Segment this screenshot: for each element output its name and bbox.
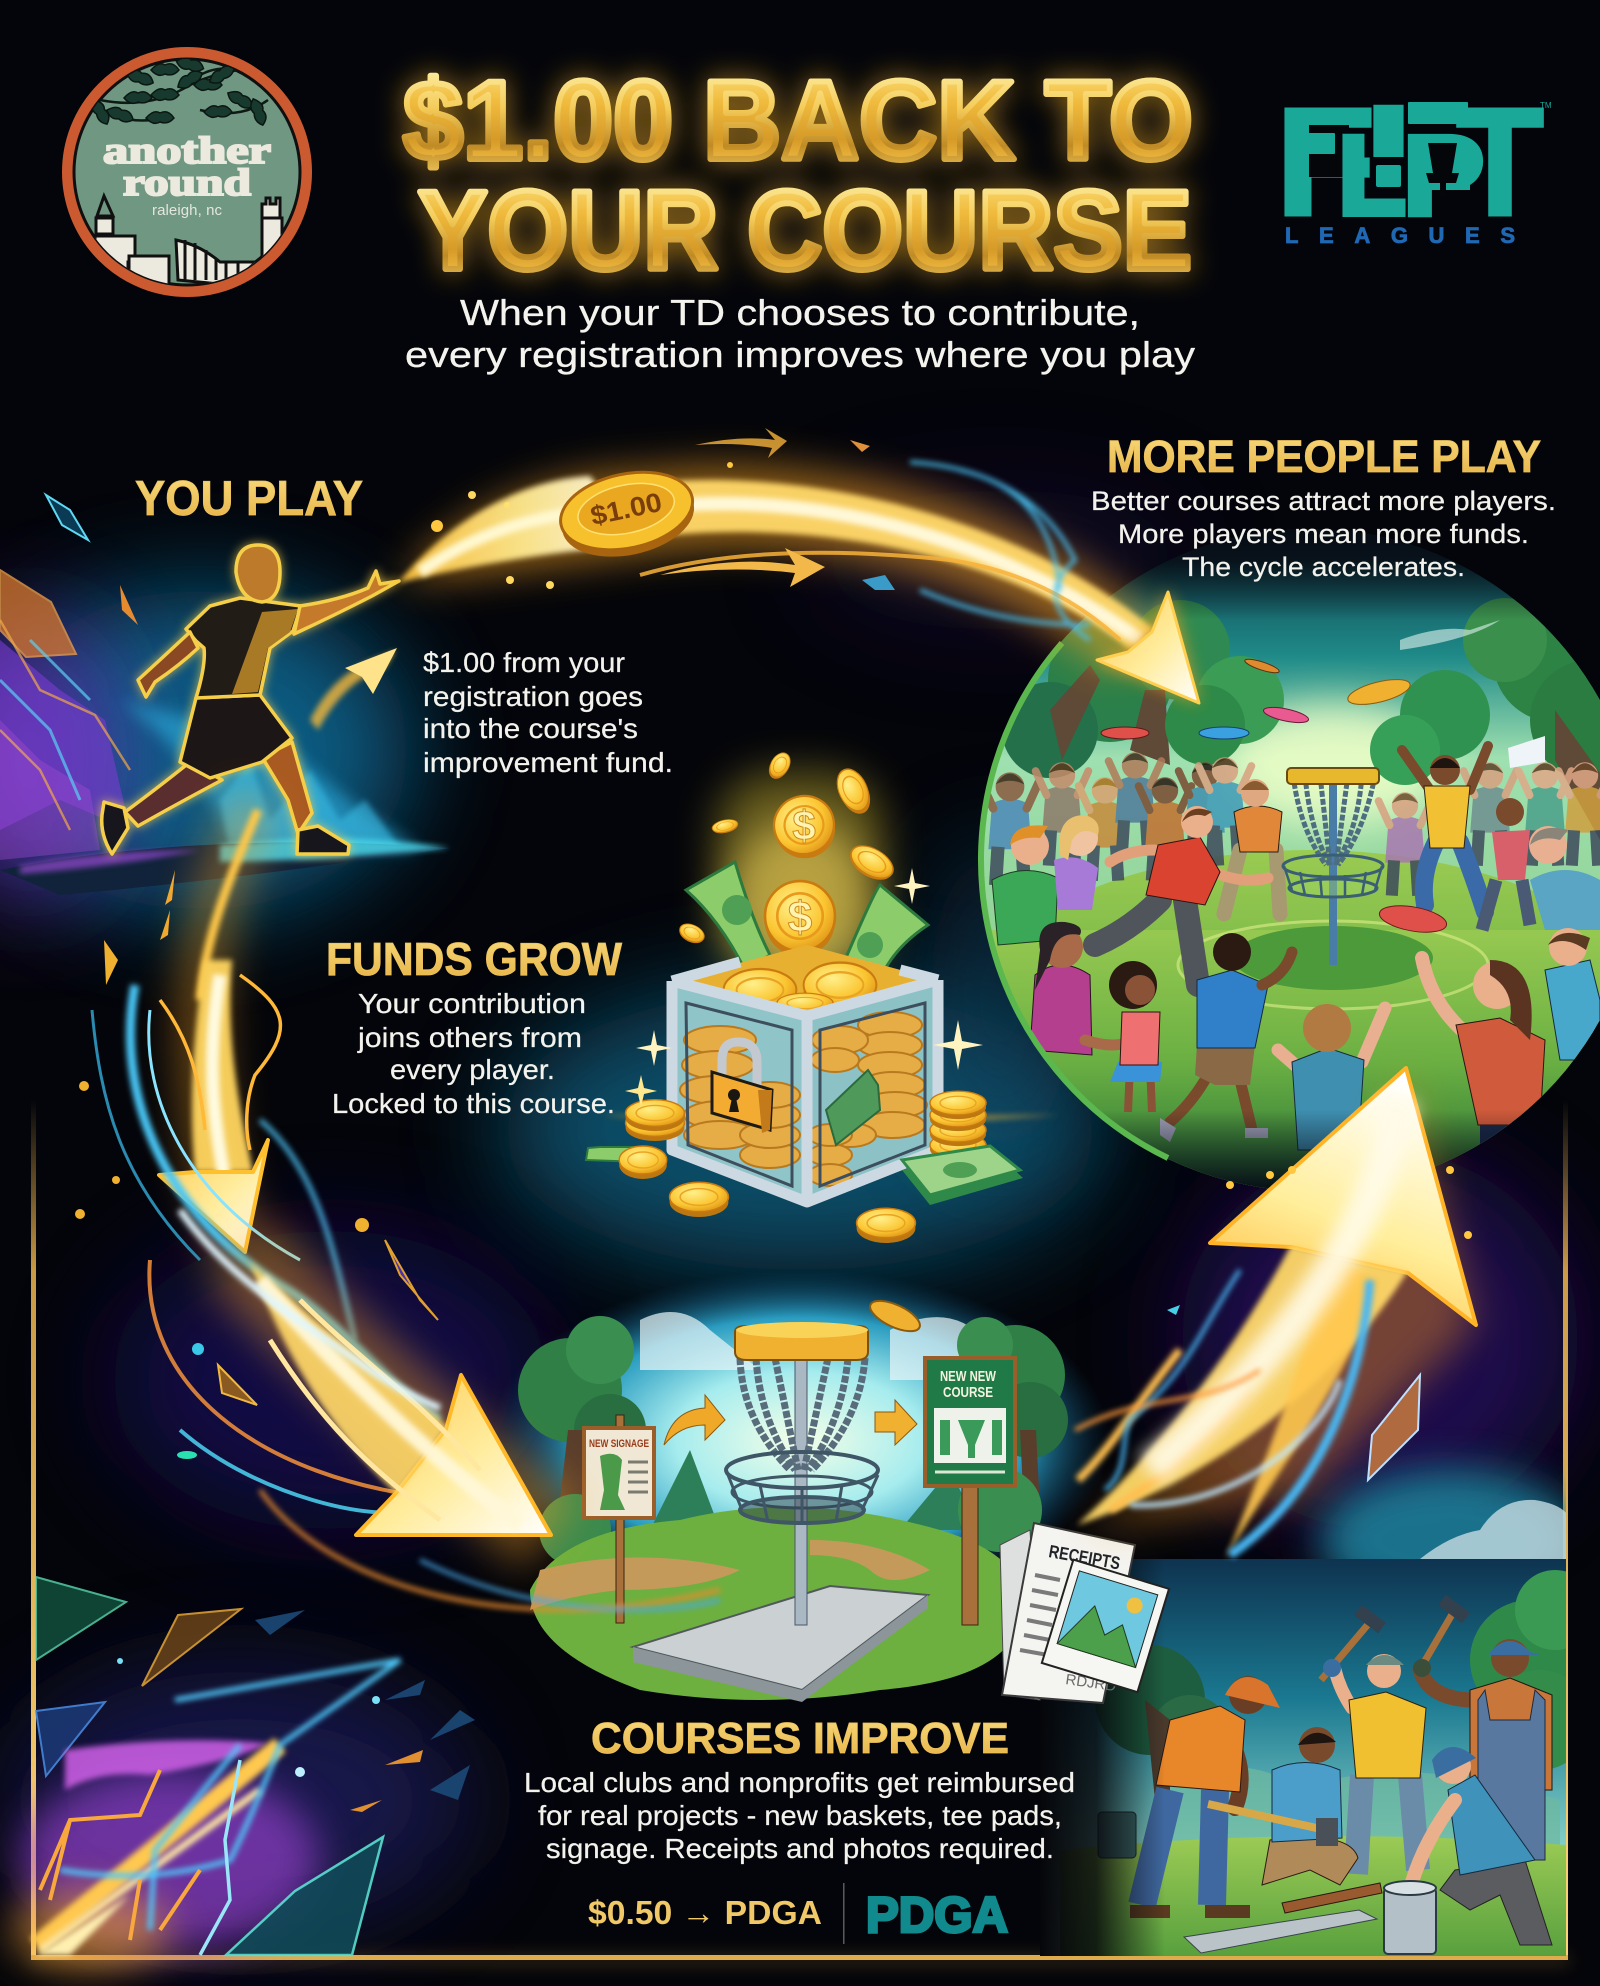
logo: FLIPT Leagues: F [1275, 76, 1376, 248]
logo: FLIPT Leagues: TM [1540, 101, 1552, 110]
heading: funds grow: FUNDS GROW [326, 933, 623, 985]
pdga line: $0.50 → PDGA [588, 1894, 822, 1931]
heading: more people play: MORE PEOPLE PLAY [1107, 431, 1541, 482]
receipts: RECEIPTS [1047, 1541, 1122, 1573]
box back [672, 945, 938, 1016]
scene: more people play [978, 529, 1600, 1188]
text: funds grow: every player. [390, 1054, 555, 1085]
bucket (left) [1098, 1812, 1136, 1858]
grass [1060, 1836, 1566, 1956]
sign: new course: COURSE [943, 1384, 993, 1401]
text: more people play: Better courses attract more players. [1091, 486, 1556, 516]
box faces [672, 981, 807, 1202]
arrow head [1095, 590, 1199, 703]
sign: new course [925, 1358, 1015, 1625]
rising coins [768, 789, 842, 865]
basket [726, 1322, 878, 1625]
heading: you play: YOU PLAY [135, 472, 363, 526]
ground [530, 1507, 1023, 1700]
flying disc [866, 1295, 924, 1337]
small arrows [695, 428, 787, 458]
logo: another round: round [123, 162, 251, 204]
rear arm [138, 632, 198, 697]
text: more people play: More players mean more funds. [1118, 519, 1529, 549]
figures: right boy and man [1482, 798, 1600, 1060]
funds box illustration: $ [792, 802, 816, 849]
photo [1042, 1560, 1169, 1692]
figure: kneeling worker right [1412, 1747, 1552, 1945]
sparkles [636, 1030, 672, 1066]
figure: orange shirt worker [1130, 1676, 1338, 1918]
figure: green shirt boy [992, 825, 1058, 945]
text: you play: into the course's [423, 713, 638, 744]
basket cutout [1426, 143, 1459, 196]
title: $1.00 BACK TO [403, 58, 1193, 183]
arrows [664, 1395, 725, 1445]
figure: orange shirt man [1224, 779, 1282, 914]
arrow: funds to courses left swoosh [92, 800, 720, 1610]
receipts [1000, 1523, 1135, 1703]
blue wisps [130, 985, 440, 1420]
text: funds grow: joins others from [357, 1022, 582, 1053]
bottom-left shards and lightning [10, 1577, 475, 1970]
big coin [765, 881, 835, 956]
torso [186, 598, 301, 698]
logo: FLIPT Leagues: L [1338, 113, 1406, 238]
funds box illustration [586, 749, 1060, 1243]
back crowd [981, 752, 1600, 896]
trees [1470, 1600, 1590, 1720]
figure: overalls man [1420, 1639, 1552, 1860]
text: funds grow: Locked to this course. [332, 1088, 615, 1119]
figure: blue shirt kid [1160, 933, 1292, 1142]
figure: woman pink [1030, 922, 1120, 1056]
figure: woman orange [1422, 958, 1545, 1170]
scene: courses improve [490, 1270, 1169, 1703]
title [403, 58, 1193, 293]
logo wordmark: another [103, 130, 271, 172]
padlock [722, 1042, 757, 1086]
back leg [125, 762, 222, 826]
tee pad [633, 1586, 928, 1690]
outside coins and cash [626, 1110, 684, 1141]
receipts: RDJRD [1064, 1671, 1117, 1695]
bills [686, 862, 770, 970]
glow [715, 770, 885, 980]
logo: FLIPT Leagues [1275, 76, 1552, 248]
figure: kneeling blue shirt [1262, 1727, 1358, 1885]
sign: new course: NEW NEW [940, 1368, 997, 1385]
sparks and small shards [75, 870, 438, 1459]
text: you play [423, 647, 673, 778]
text: you play: improvement fund. [423, 747, 673, 778]
logo: another round [68, 53, 306, 291]
grass [996, 850, 1600, 1188]
text: more people play [1091, 486, 1556, 582]
bucket and slab [1184, 1881, 1436, 1954]
coin stacks inside [680, 1012, 927, 1186]
disc: $1.00 [553, 461, 701, 568]
arrow: top swoosh to more people play [398, 428, 1199, 703]
arrow: lower-left to courses [180, 1210, 551, 1535]
figure: red shirt runner [1095, 806, 1268, 985]
sign: new signage: NEW SIGNAGE [589, 1438, 649, 1450]
subtitle [405, 292, 1195, 375]
logo: FLIPT Leagues: I [1364, 91, 1413, 172]
heading: courses improve: COURSES IMPROVE [591, 1714, 1009, 1763]
sign: new signage [584, 1415, 654, 1623]
logo: FLIPT Leagues: P [1403, 113, 1484, 238]
text: courses improve: for real projects - new baskets, tee pads, [538, 1800, 1062, 1831]
green ring [981, 643, 1168, 1158]
text: funds grow [332, 988, 615, 1119]
figure: yellow shirt man [1335, 1654, 1426, 1874]
discs [1101, 657, 1449, 937]
lightning [65, 1740, 268, 1790]
left fade [1040, 1559, 1165, 1959]
text: you play: $1.00 from your [423, 647, 625, 678]
figure: yellow shirt cheering man [1402, 736, 1545, 912]
frame [30, 1100, 1570, 1960]
logo: FLIPT Leagues: LEAGUES [1285, 223, 1515, 248]
arrow: courses up to more people [1075, 1068, 1476, 1560]
head [236, 545, 280, 602]
text: courses improve: Local clubs and nonprofits get reimbursed [524, 1767, 1075, 1798]
logo: another round: raleigh, nc [152, 202, 222, 219]
funds box illustration: $ [788, 893, 812, 942]
text: more people play: The cycle accelerates. [1182, 552, 1465, 582]
throwing arm [294, 571, 399, 634]
title: YOUR COURSE [418, 168, 1192, 293]
front leg [262, 742, 312, 834]
figure: back-facing boy [1278, 1004, 1385, 1150]
disc: $1.00: $1.00 [588, 487, 665, 531]
arrow: registration flick [310, 648, 397, 730]
edge fades [970, 500, 1600, 620]
player figure [102, 545, 399, 854]
arrow head down [159, 1140, 268, 1252]
left shards and player glow [0, 495, 450, 895]
text: courses improve [524, 1767, 1075, 1864]
sky glow [490, 1270, 1110, 1610]
text: courses improve: signage. Receipts and photos required. [546, 1833, 1054, 1864]
box frame [672, 962, 938, 1202]
shorts [180, 695, 292, 778]
scene: workers [1040, 1470, 1595, 1959]
figure: curly girl [1109, 961, 1162, 1112]
trees [1048, 618, 1172, 742]
trees [518, 1316, 1068, 1566]
subtitle: every registration improves where you play [405, 334, 1195, 375]
leafy branches [88, 55, 282, 291]
skyline [95, 196, 282, 291]
text: funds grow: Your contribution [358, 988, 586, 1019]
text: you play: registration goes [423, 681, 643, 712]
pdga line [588, 1883, 1008, 1944]
logo: PDGA: PDGA [866, 1887, 1008, 1943]
figure: blonde girl [1054, 815, 1099, 910]
logo: FLIPT Leagues: T [1456, 76, 1544, 248]
hammers [1321, 1600, 1466, 1680]
disc basket [1283, 768, 1383, 965]
subtitle: When your TD chooses to contribute, [460, 292, 1140, 333]
